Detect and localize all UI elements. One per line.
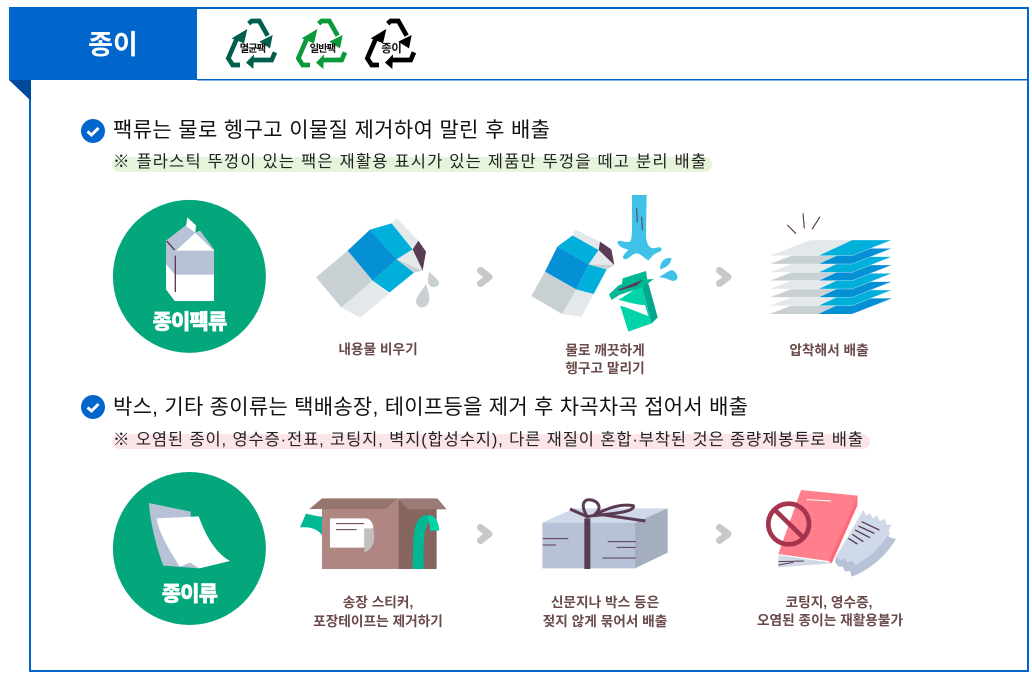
illustration: emptying carton	[316, 218, 439, 318]
label	[565, 343, 645, 376]
badge: carton	[113, 200, 266, 353]
arrow	[480, 528, 489, 540]
icon: recycle mark, general carton	[298, 21, 345, 69]
illustration: tied bundle	[542, 500, 668, 569]
arrow	[720, 528, 728, 540]
label: 압착해서 배출	[789, 343, 869, 358]
icon: check 2	[81, 395, 105, 419]
label: 헹구고 말리기	[565, 361, 645, 376]
badge: paper	[113, 472, 266, 625]
label	[543, 595, 667, 629]
icon: recycle mark, carton: 멸균팩	[240, 42, 266, 55]
header tab: 종이	[88, 30, 138, 60]
label: 젖지 않게 묶어서 배출	[543, 614, 667, 629]
heading: carton: 팩류는 물로 헹구고 이물질 제거하여 말린 후 배출	[113, 119, 550, 142]
note: carton: ※ 플라스틱 뚜껑이 있는 팩은 재활용 표시가 있는 제품만 뚜껑을 떼고 분리 배출	[113, 152, 706, 171]
icon: recycle mark, carton	[228, 21, 275, 69]
label: 내용물 비우기	[338, 342, 418, 357]
header tab	[9, 8, 197, 101]
note: boxes: ※ 오염된 종이, 영수증·전표, 코팅지, 벽지(합성수지), 다른 재질이 혼합·부착된 것은 종량제봉투로 배출	[113, 430, 863, 449]
icon: check 1	[81, 119, 105, 143]
illustration: box with label and tape	[300, 498, 447, 569]
icon: recycle mark, paper: 종이	[381, 42, 401, 55]
badge: carton: 종이팩류	[152, 311, 227, 334]
label: 송장 스티커,	[343, 595, 413, 610]
icon: recycle mark, general carton: 일반팩	[310, 42, 336, 55]
heading: boxes: 박스, 기타 종이류는 택배송장, 테이프등을 제거 후 차곡차곡 접어서 배출	[113, 396, 748, 419]
illustration: non-recyclable paper	[768, 490, 896, 577]
arrow	[720, 270, 728, 284]
badge: paper: 종이류	[162, 583, 218, 606]
illustration: rinsing carton	[531, 195, 677, 332]
label	[757, 595, 903, 628]
label: 코팅지, 영수증,	[786, 595, 872, 610]
header rule	[197, 79, 1028, 80]
label: 신문지나 박스 등은	[551, 595, 660, 610]
label	[313, 595, 443, 629]
label: 오염된 종이는 재활용불가	[757, 613, 903, 628]
arrow	[480, 270, 489, 284]
label: 포장테이프는 제거하기	[313, 614, 443, 629]
label: 물로 깨끗하게	[565, 343, 645, 358]
illustration: compressed stack	[769, 213, 892, 314]
icon: recycle mark, paper	[367, 21, 414, 69]
